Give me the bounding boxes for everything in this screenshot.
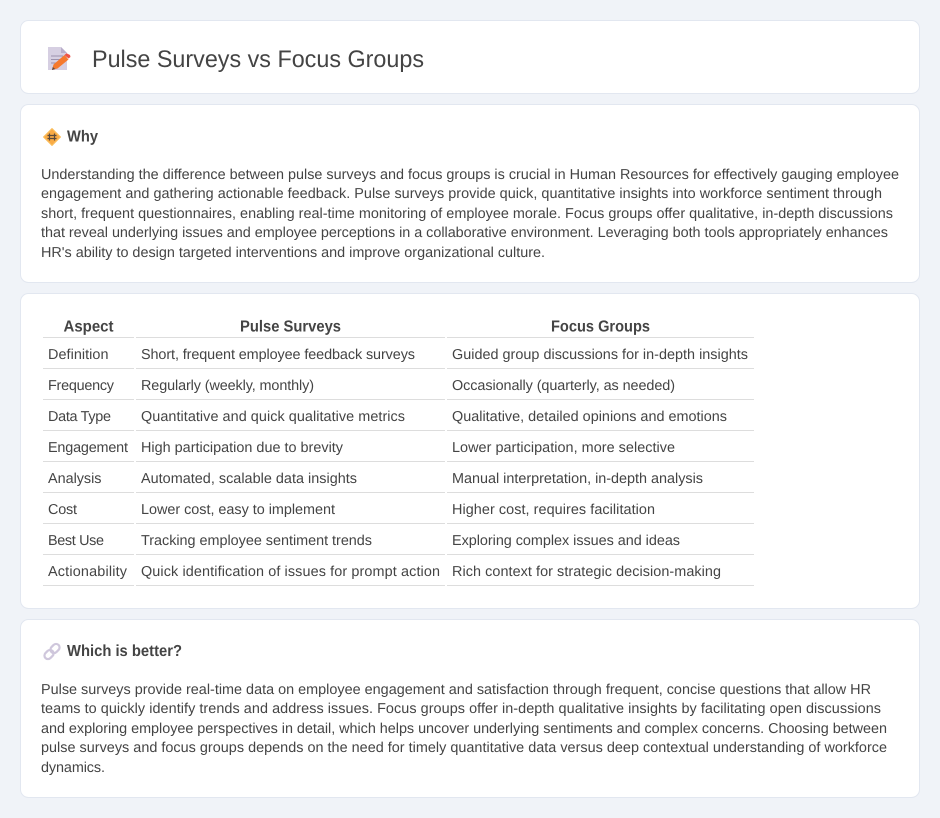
row: data type: Data Type (48, 409, 111, 425)
panel: why (20, 104, 920, 282)
row: analysis: Manual interpretation, in-depth analysis (452, 471, 703, 487)
row: cost (48, 502, 655, 518)
why text block: Understanding the difference between pulse surveys and focus groups is crucial in Human Resources for effectively gauging employee (41, 167, 899, 183)
row: frequency (48, 378, 675, 394)
row: data type: Quantitative and quick qualitative metrics (141, 409, 405, 425)
panel: comparison table (20, 294, 920, 608)
row: frequency: Frequency (48, 378, 115, 394)
row: definition: Definition (48, 347, 108, 363)
which is better text block: pulse surveys and focus groups depends on the need for timely quantitative data versus deep contextual understanding of workforce (41, 740, 887, 756)
row: engagement: Lower participation, more selective (452, 440, 675, 456)
heading: why: Why (67, 128, 98, 146)
row: frequency: Regularly (weekly, monthly) (141, 378, 314, 394)
why text block: HR's ability to design targeted interventions and improve organizational culture. (41, 245, 545, 261)
row: cost: Cost (48, 502, 77, 518)
row: frequency: Occasionally (quarterly, as needed) (452, 378, 675, 394)
row: engagement: Engagement (48, 440, 128, 456)
row: analysis (48, 471, 703, 487)
row: actionability: Rich context for strategic decision-making (452, 564, 721, 580)
table header row: Aspect (64, 318, 114, 336)
which is better text block: teams to quickly identify trends and address issues. Focus groups offer in-depth qualitative insights by facilitating open discussions (41, 701, 881, 717)
why text block: engagement and gathering actionable feedback. Pulse surveys provide quick, quantitative insights into workforce sentiment through (41, 186, 882, 202)
row: definition: Short, frequent employee feedback surveys (141, 347, 415, 363)
row: best use: Exploring complex issues and ideas (452, 533, 680, 549)
row: best use: Tracking employee sentiment trends (141, 533, 372, 549)
which is better text block: dynamics. (41, 760, 105, 776)
which is better text block (41, 682, 887, 776)
why text block (41, 167, 899, 261)
row: data type: Qualitative, detailed opinions and emotions (452, 409, 727, 425)
panel: which is better (20, 620, 920, 798)
which is better text block: and exploring employee perspectives in detail, which helps uncover underlying sentiments and complex concerns. Choosing between (41, 721, 887, 737)
icon: diamond sign (44, 128, 60, 146)
row: cost: Higher cost, requires facilitation (452, 502, 655, 518)
row: engagement (48, 440, 675, 456)
row: cost: Lower cost, easy to implement (141, 502, 335, 518)
why text block: short, frequent questionnaires, enabling real-time monitoring of employee morale. Focus groups offer qualitative, in-depth discussions (41, 206, 893, 222)
row: analysis: Automated, scalable data insights (141, 471, 357, 487)
row: analysis: Analysis (48, 471, 102, 487)
icon: memo with pencil (48, 47, 70, 70)
why text block: that reveal underlying issues and employee perceptions in a collaborative environment. Leveraging both tools appropriately enhances (41, 225, 888, 241)
row: actionability: Quick identification of issues for prompt action (141, 564, 440, 580)
row: actionability: Actionability (48, 564, 128, 580)
title: Pulse Surveys vs Focus Groups (92, 46, 424, 73)
row: actionability (48, 564, 721, 580)
table header row: Pulse Surveys (240, 318, 341, 336)
row: engagement: High participation due to brevity (141, 440, 344, 456)
row: data type (48, 409, 727, 425)
icon: link (43, 642, 61, 661)
row: best use (48, 533, 680, 549)
row: definition: Guided group discussions for in-depth insights (452, 347, 748, 363)
row: definition (48, 347, 748, 363)
row: best use: Best Use (48, 533, 104, 549)
header panel (20, 20, 920, 94)
which is better text block: Pulse surveys provide real-time data on employee engagement and satisfaction through frequent, concise questions that allow HR (41, 682, 871, 698)
heading: which is better: Which is better? (67, 643, 182, 660)
table header row: Focus Groups (551, 318, 650, 336)
table header row (64, 318, 650, 336)
